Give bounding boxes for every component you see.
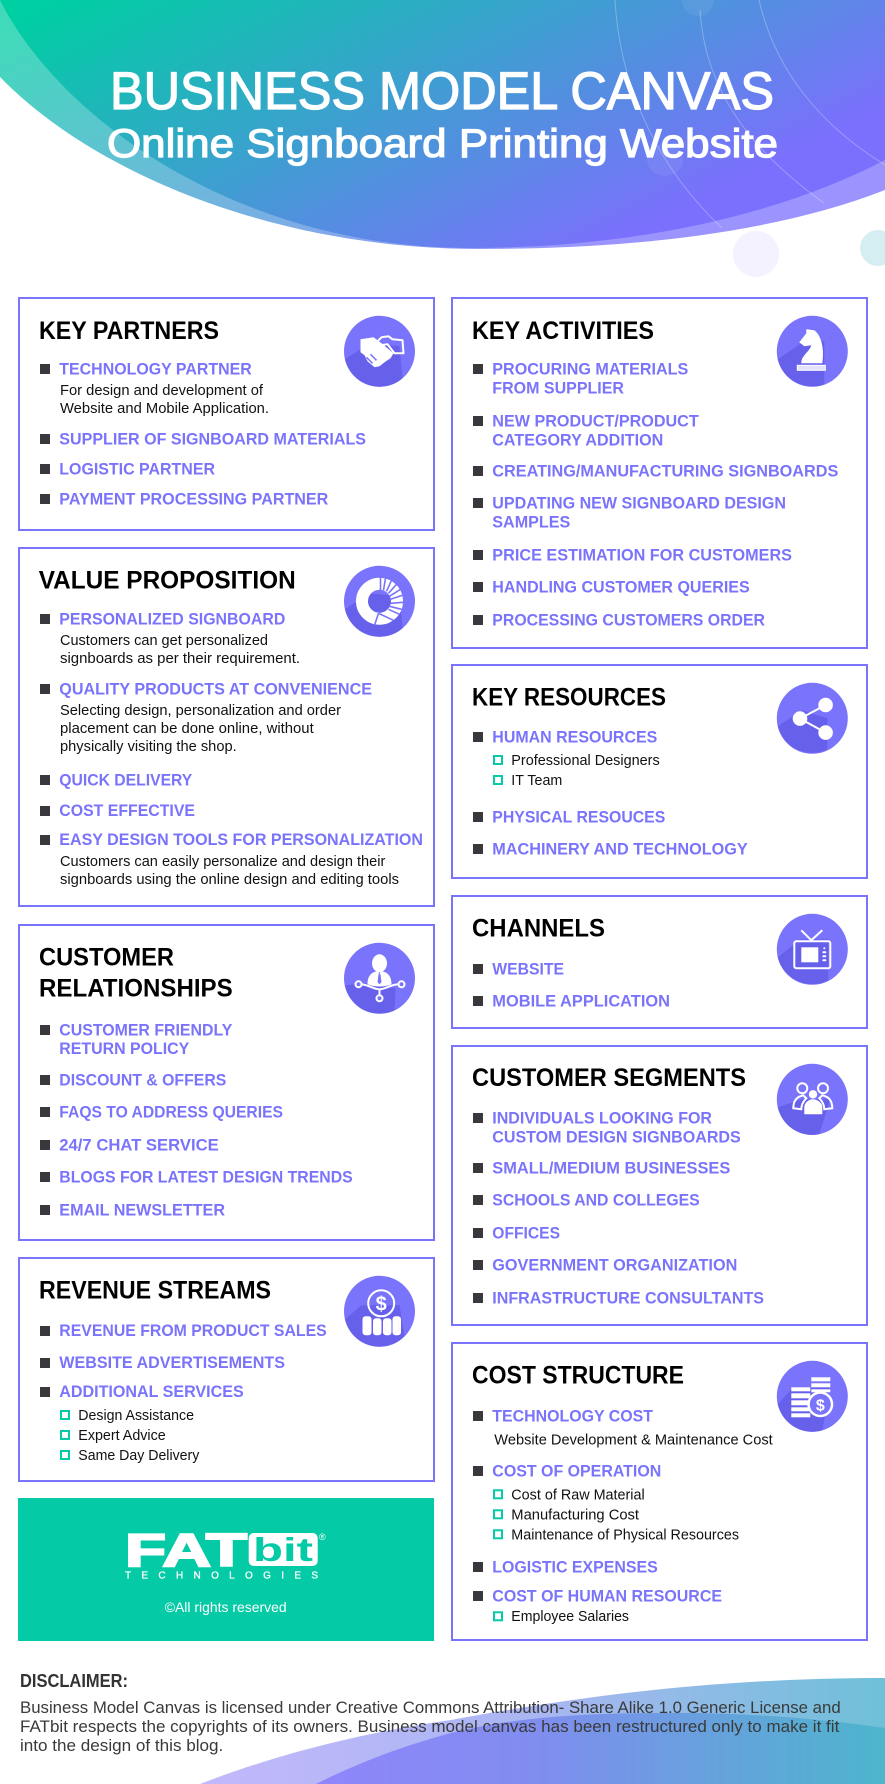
logo: FATbit Technologies xyxy=(125,1524,326,1582)
item: mobile application: MOBILE APPLICATION xyxy=(492,991,670,1010)
item: technology partner: Website and Mobile Application. xyxy=(60,400,269,417)
icon: group of people xyxy=(777,1064,848,1135)
item: updating samples: SAMPLES xyxy=(492,512,570,531)
item: logistic expenses: LOGISTIC EXPENSES xyxy=(492,1557,658,1576)
disclaimer: into the design of this blog. xyxy=(20,1736,223,1755)
copyright: ©All rights reserved xyxy=(165,1599,287,1615)
logo: FATbit Technologies: FAT xyxy=(125,1524,247,1576)
item: individuals xyxy=(473,1108,741,1146)
item: easy design tools: Customers can easily personalize and design their xyxy=(60,853,385,870)
item: cost of operation: Manufacturing Cost xyxy=(511,1506,640,1523)
item: human resources: IT Team xyxy=(511,772,562,789)
item: cost of operation xyxy=(473,1461,739,1543)
item: schools and colleges: SCHOOLS AND COLLEGES xyxy=(492,1190,700,1209)
icon: person with connections xyxy=(344,943,415,1014)
item: technology cost: TECHNOLOGY COST xyxy=(492,1406,654,1425)
title: BUSINESS MODEL CANVAS xyxy=(110,62,774,121)
heading: key activities: KEY ACTIVITIES xyxy=(472,317,654,345)
item: procuring materials xyxy=(473,359,688,397)
item: quality products: Selecting design, personalization and order xyxy=(60,702,341,719)
footer wave xyxy=(200,1678,885,1784)
icon: share nodes xyxy=(777,683,848,754)
item: additional services xyxy=(40,1382,244,1464)
heading: customer relationships xyxy=(39,944,233,1003)
heading: key partners: KEY PARTNERS xyxy=(39,317,219,345)
item: procuring materials: FROM SUPPLIER xyxy=(492,378,624,397)
heading: customer relationships: RELATIONSHIPS xyxy=(39,975,233,1003)
item: supplier: SUPPLIER OF SIGNBOARD MATERIALS xyxy=(59,429,366,448)
item: new product: CATEGORY ADDITION xyxy=(492,430,663,449)
item: creating signboards: CREATING/MANUFACTURING SIGNBOARDS xyxy=(492,461,838,480)
logo: FATbit Technologies: TECHNOLOGIES xyxy=(125,1571,318,1582)
heading: customer relationships: CUSTOMER xyxy=(39,944,174,972)
item: offices: OFFICES xyxy=(492,1223,560,1242)
panel: cost structure xyxy=(452,1343,867,1640)
icon: revenue coin and bars: $ xyxy=(376,1293,387,1315)
item: logistic partner: LOGISTIC PARTNER xyxy=(59,459,215,478)
item: physical resources: PHYSICAL RESOUCES xyxy=(492,807,665,826)
item: chat service: 24/7 CHAT SERVICE xyxy=(59,1135,219,1154)
item: personalized signboard: PERSONALIZED SIGNBOARD xyxy=(59,609,285,628)
item: procuring materials: PROCURING MATERIALS xyxy=(492,359,688,378)
item: easy design tools: EASY DESIGN TOOLS FOR PERSONALIZATION xyxy=(59,830,423,849)
item: quality products: placement can be done online, without xyxy=(60,720,315,737)
icon: coins xyxy=(777,1361,848,1432)
panel: customer segments xyxy=(452,1046,867,1325)
footer brand panel xyxy=(18,1498,434,1641)
item: additional services: ADDITIONAL SERVICES xyxy=(59,1382,244,1401)
panel: value proposition xyxy=(19,548,434,906)
item: individuals: CUSTOM DESIGN SIGNBOARDS xyxy=(492,1127,741,1146)
item: additional services: Same Day Delivery xyxy=(78,1447,200,1464)
item: infrastructure consultants: INFRASTRUCTURE CONSULTANTS xyxy=(492,1288,764,1307)
panel: channels xyxy=(452,896,867,1028)
disclaimer xyxy=(20,1671,841,1755)
item: updating samples: UPDATING NEW SIGNBOARD DESIGN xyxy=(492,493,786,512)
header background wave xyxy=(0,0,885,277)
item: email newsletter: EMAIL NEWSLETTER xyxy=(59,1200,225,1219)
item: quality products: QUALITY PRODUCTS AT CONVENIENCE xyxy=(59,679,372,698)
item: easy design tools: signboards using the online design and editing tools xyxy=(60,871,399,888)
item: cost effective: COST EFFECTIVE xyxy=(59,801,195,820)
item: technology partner xyxy=(40,359,269,417)
item: quality products xyxy=(40,679,372,755)
item: handling queries: HANDLING CUSTOMER QUERIES xyxy=(492,577,750,596)
icon: revenue coin and bars xyxy=(344,1276,415,1347)
disclaimer: FATbit respects the copyrights of its owners. Business model canvas has been restructured only to make it fit xyxy=(20,1717,840,1736)
item: technology partner: TECHNOLOGY PARTNER xyxy=(59,359,252,378)
item: human resources: HUMAN RESOURCES xyxy=(492,727,657,746)
item: discount and offers: DISCOUNT & OFFERS xyxy=(59,1070,226,1089)
item: machinery and technology: MACHINERY AND TECHNOLOGY xyxy=(492,839,748,858)
item: cost of operation: Cost of Raw Material xyxy=(511,1486,645,1503)
item: quick delivery: QUICK DELIVERY xyxy=(59,770,193,789)
heading: channels: CHANNELS xyxy=(472,915,605,943)
item: new product: NEW PRODUCT/PRODUCT xyxy=(492,411,699,430)
item: price estimation: PRICE ESTIMATION FOR CUSTOMERS xyxy=(492,545,792,564)
item: cost of human resource: Employee Salaries xyxy=(511,1608,629,1625)
item: small medium businesses: SMALL/MEDIUM BUSINESSES xyxy=(492,1158,730,1177)
item: quality products: physically visiting the shop. xyxy=(60,738,237,755)
item: processing order: PROCESSING CUSTOMERS ORDER xyxy=(492,610,765,629)
item: personalized signboard: Customers can get personalized xyxy=(60,632,268,649)
item: technology partner: For design and development of xyxy=(60,382,264,399)
item: new product xyxy=(473,411,699,449)
item: updating samples xyxy=(473,493,786,531)
heading: cost structure: COST STRUCTURE xyxy=(472,1362,684,1390)
panel: key partners xyxy=(19,298,434,530)
item: technology cost: Website Development & Maintenance Cost xyxy=(494,1431,774,1448)
item: return policy xyxy=(40,1020,233,1058)
heading: customer segments: CUSTOMER SEGMENTS xyxy=(472,1064,746,1092)
heading: value proposition: VALUE PROPOSITION xyxy=(39,567,296,595)
icon: coins: $ xyxy=(816,1397,825,1414)
panel: revenue streams xyxy=(19,1258,434,1481)
logo: FATbit Technologies: ® xyxy=(319,1532,326,1542)
logo: FATbit Technologies: bit xyxy=(253,1531,313,1568)
item: payment processing partner: PAYMENT PROCESSING PARTNER xyxy=(59,489,328,508)
item: human resources: Professional Designers xyxy=(511,752,660,769)
disclaimer: Business Model Canvas is licensed under Creative Commons Attribution- Share Alike 1.0 Generic License and xyxy=(20,1698,841,1717)
item: return policy: CUSTOMER FRIENDLY xyxy=(59,1020,233,1039)
disclaimer: DISCLAIMER: xyxy=(20,1671,128,1691)
item: personalized signboard xyxy=(40,609,300,667)
item: cost of operation: Maintenance of Physical Resources xyxy=(511,1526,739,1543)
item: return policy: RETURN POLICY xyxy=(59,1039,190,1058)
item: additional services: Design Assistance xyxy=(78,1407,194,1424)
item: blogs: BLOGS FOR LATEST DESIGN TRENDS xyxy=(59,1167,353,1186)
item: website advertisements: WEBSITE ADVERTISEMENTS xyxy=(59,1353,285,1372)
panel: key activities xyxy=(452,298,867,648)
subtitle: Online Signboard Printing Website xyxy=(107,122,778,166)
icon: handshake xyxy=(344,316,415,387)
item: revenue from product sales: REVENUE FROM PRODUCT SALES xyxy=(59,1321,327,1340)
heading: revenue streams: REVENUE STREAMS xyxy=(39,1277,271,1305)
item: cost of human resource: COST OF HUMAN RESOURCE xyxy=(492,1586,722,1605)
item: additional services: Expert Advice xyxy=(78,1427,166,1444)
item: individuals: INDIVIDUALS LOOKING FOR xyxy=(492,1108,712,1127)
icon: television xyxy=(777,914,848,985)
item: government organization: GOVERNMENT ORGANIZATION xyxy=(492,1255,737,1274)
item: human resources xyxy=(473,727,660,789)
item: easy design tools xyxy=(40,830,423,888)
item: personalized signboard: signboards as per their requirement. xyxy=(60,650,300,667)
panel: key resources xyxy=(452,665,867,878)
item: website: WEBSITE xyxy=(492,959,564,978)
item: technology cost xyxy=(473,1406,774,1448)
heading: key resources: KEY RESOURCES xyxy=(472,684,666,712)
icon: donut chart xyxy=(344,566,415,637)
panel: customer relationships xyxy=(19,925,434,1240)
item: faqs: FAQS TO ADDRESS QUERIES xyxy=(59,1102,283,1121)
icon: chess knight xyxy=(777,316,848,387)
item: cost of operation: COST OF OPERATION xyxy=(492,1461,661,1480)
item: cost of human resource xyxy=(473,1586,722,1625)
